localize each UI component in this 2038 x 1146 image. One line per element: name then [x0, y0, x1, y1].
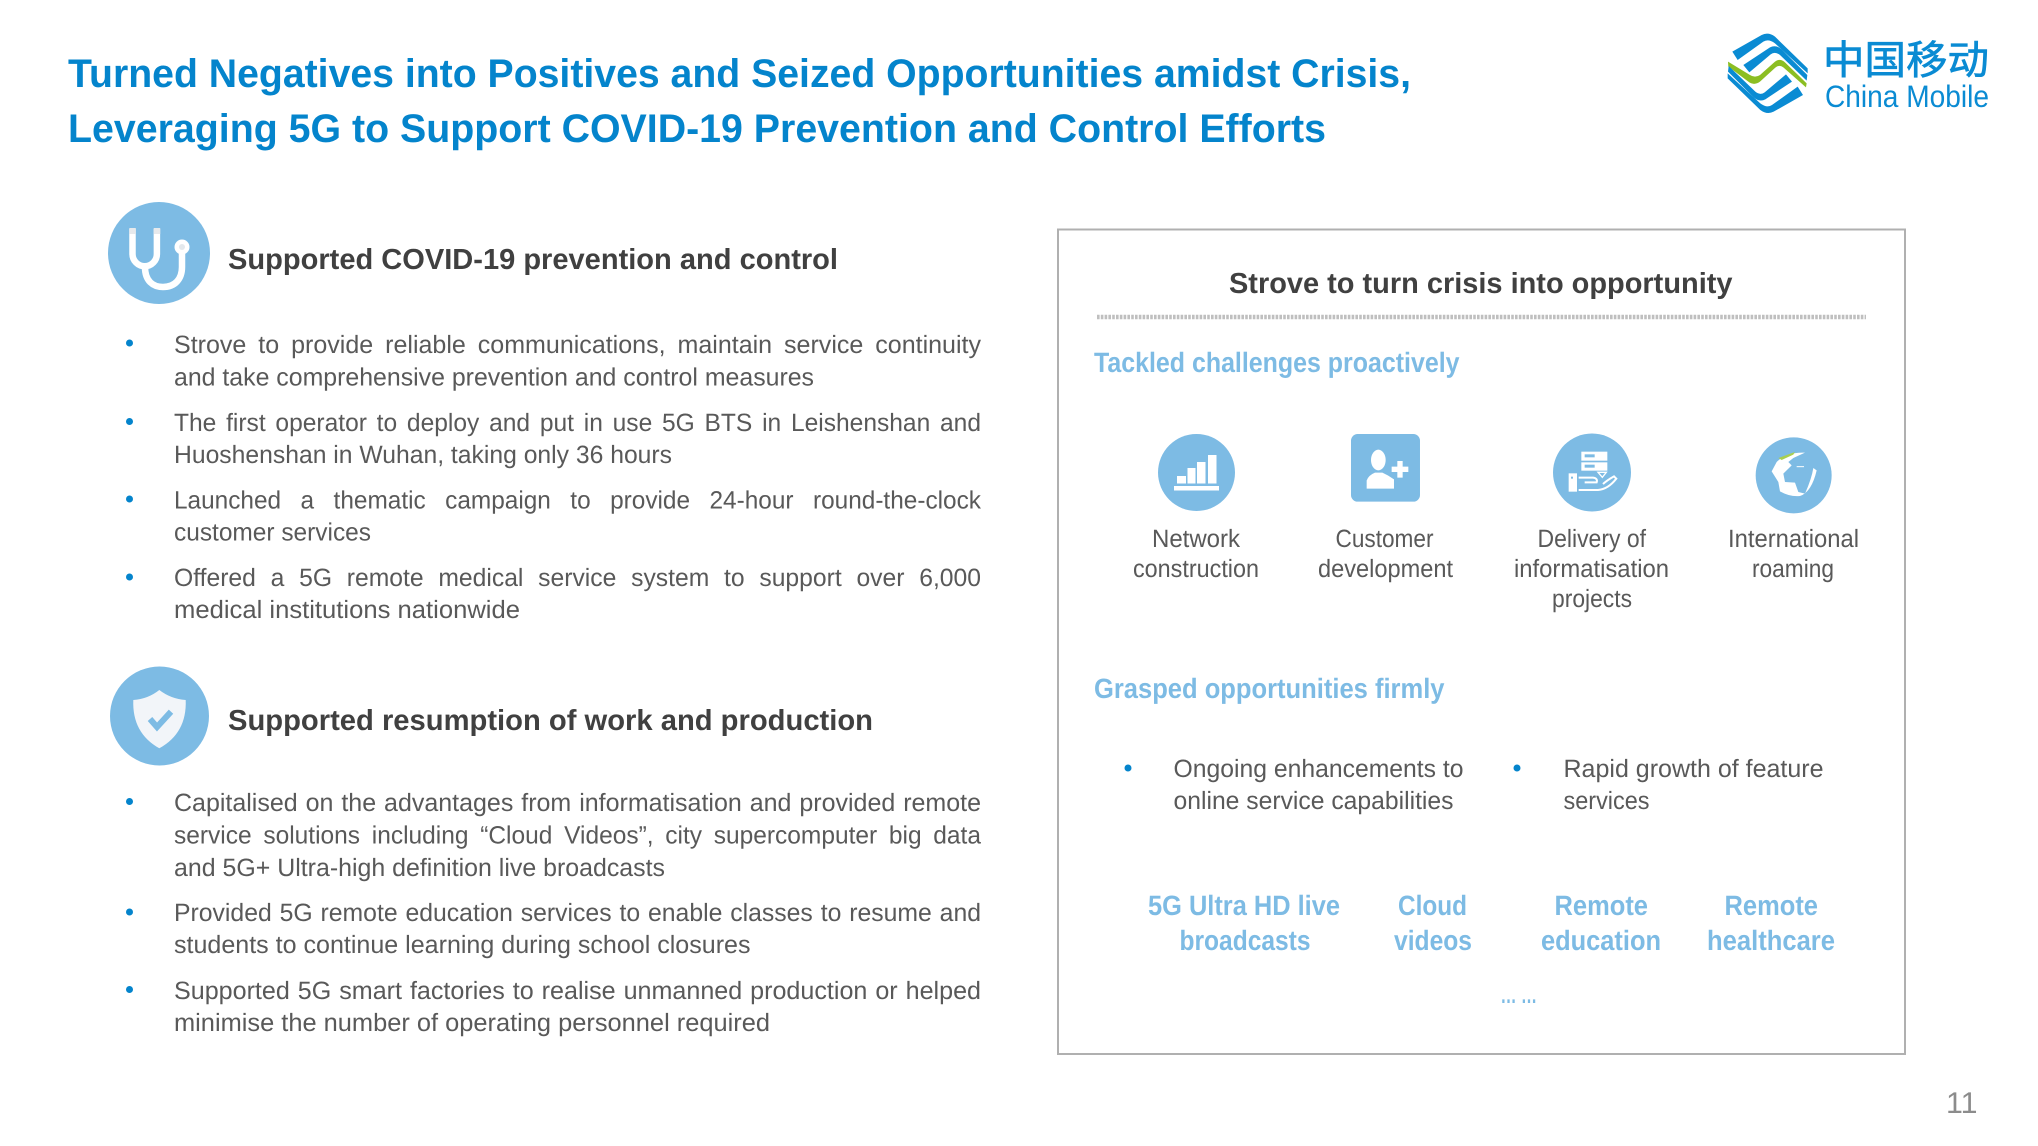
- bullet list: resumption measures: and 5G+ Ultra-high definition live broadcasts: [174, 854, 665, 882]
- icon: stethoscope: [108, 202, 210, 304]
- title: [68, 52, 1411, 151]
- opportunity: 5G Ultra HD live broadcasts: [1148, 890, 1340, 956]
- label: customer development: development: [1318, 555, 1453, 583]
- title: Leveraging 5G to Support COVID-19 Prevention and Control Efforts: [68, 107, 1326, 151]
- bullet list: prevention measures: medical institutions nationwide: [174, 596, 520, 624]
- opportunity: cloud videos: [1394, 890, 1472, 956]
- icon: delivery of informatisation projects: [1553, 433, 1631, 511]
- bullet list: resumption measures: Provided 5G remote education services to enable classes to resume and: [174, 899, 981, 927]
- logo: China Mobile: 中国移动: [1823, 28, 1989, 86]
- label: customer development: Customer: [1336, 525, 1434, 553]
- bullet: feature services: Rapid growth of feature: [1564, 755, 1824, 783]
- icon: customer development: [1351, 434, 1420, 502]
- opportunity: cloud videos: Cloud: [1398, 890, 1467, 921]
- opportunity: remote education: education: [1541, 925, 1661, 956]
- panel heading: Strove to turn crisis into opportunity: [1229, 268, 1732, 300]
- label: network construction: [1133, 525, 1259, 583]
- bullet list: prevention measures: Launched a thematic campaign to provide 24-hour round-the-clock: [174, 486, 981, 514]
- opportunity: remote education: Remote: [1554, 890, 1648, 921]
- label: delivery of informatisation projects: Delivery of: [1538, 525, 1646, 553]
- bullet: feature services: [1514, 755, 1824, 815]
- label: network construction: construction: [1133, 555, 1259, 583]
- bullet list: prevention measures: [126, 331, 981, 624]
- bullet list: resumption measures: students to continue learning during school closures: [174, 931, 750, 959]
- logo: China Mobile: China Mobile: [1825, 79, 1989, 114]
- opportunity: remote education: [1541, 890, 1661, 956]
- opportunity: remote healthcare: healthcare: [1707, 925, 1835, 956]
- bullet: online service capabilities: online service capabilities: [1174, 787, 1454, 815]
- label: delivery of informatisation projects: projects: [1552, 585, 1632, 613]
- title: Turned Negatives into Positives and Seized Opportunities amidst Crisis,: [68, 52, 1411, 96]
- bullet list: prevention measures: Offered a 5G remote medical service system to support over 6,000: [174, 564, 981, 592]
- opportunity: remote healthcare: Remote: [1724, 890, 1818, 921]
- bullet: feature services: services: [1564, 787, 1650, 815]
- opportunity: remote healthcare: [1707, 890, 1835, 956]
- bullet list: prevention measures: Strove to provide reliable communications, maintain service continuity: [174, 331, 981, 359]
- subheading: grasped opportunities: Grasped opportunities firmly: [1094, 673, 1445, 704]
- bullet list: resumption measures: [126, 789, 981, 1037]
- label: network construction: Network: [1152, 525, 1240, 553]
- bullet list: prevention measures: The first operator to deploy and put in use 5G BTS in Leishenshan and: [174, 409, 981, 437]
- opportunity: cloud videos: videos: [1394, 925, 1472, 956]
- bullet: online service capabilities: [1124, 755, 1464, 815]
- icon: network construction: [1158, 434, 1235, 511]
- label: customer development: [1318, 525, 1453, 583]
- logo: China Mobile: [1728, 28, 1989, 114]
- heading: COVID-19 prevention and control: Supported COVID-19 prevention and control: [228, 244, 838, 276]
- panel: COVID-19 prevention and control: [108, 202, 981, 624]
- panel: resumption of work and production: [110, 666, 981, 1037]
- bullet list: prevention measures: customer services: [174, 518, 371, 546]
- panel: strove to turn crisis into opportunity: [1058, 230, 1905, 1054]
- bullet: online service capabilities: Ongoing enhancements to: [1174, 755, 1464, 783]
- icon: shield with check: [110, 666, 209, 766]
- opportunity: 5G Ultra HD live broadcasts: 5G Ultra HD live: [1148, 890, 1340, 921]
- icon: China Mobile mark: [1728, 34, 1808, 113]
- heading: resumption of work and production: Supported resumption of work and production: [228, 705, 873, 737]
- bullet list: resumption measures: Capitalised on the advantages from informatisation and provided remote: [174, 789, 981, 817]
- bullet list: resumption measures: minimise the number of operating personnel required: [174, 1009, 770, 1037]
- subheading: tackled challenges: Tackled challenges proactively: [1094, 347, 1460, 378]
- label: delivery of informatisation projects: informatisation: [1514, 555, 1669, 583]
- label: international roaming: roaming: [1752, 555, 1834, 583]
- bullet list: prevention measures: Huoshenshan in Wuhan, taking only 36 hours: [174, 441, 672, 469]
- bullet list: resumption measures: Supported 5G smart factories to realise unmanned production or helped: [174, 977, 981, 1005]
- bullet list: prevention measures: and take comprehensive prevention and control measures: [174, 364, 814, 392]
- label: international roaming: International: [1728, 525, 1859, 553]
- page number: 11: [1946, 1087, 1978, 1120]
- label: delivery of informatisation projects: [1514, 525, 1669, 613]
- icon: international roaming globe: [1756, 437, 1832, 513]
- bullet list: resumption measures: service solutions including “Cloud Videos”, city supercomputer big data: [174, 822, 981, 850]
- label: international roaming: [1728, 525, 1859, 583]
- opportunity: 5G Ultra HD live broadcasts: broadcasts: [1180, 925, 1310, 956]
- ellipsis: … …: [1500, 982, 1537, 1009]
